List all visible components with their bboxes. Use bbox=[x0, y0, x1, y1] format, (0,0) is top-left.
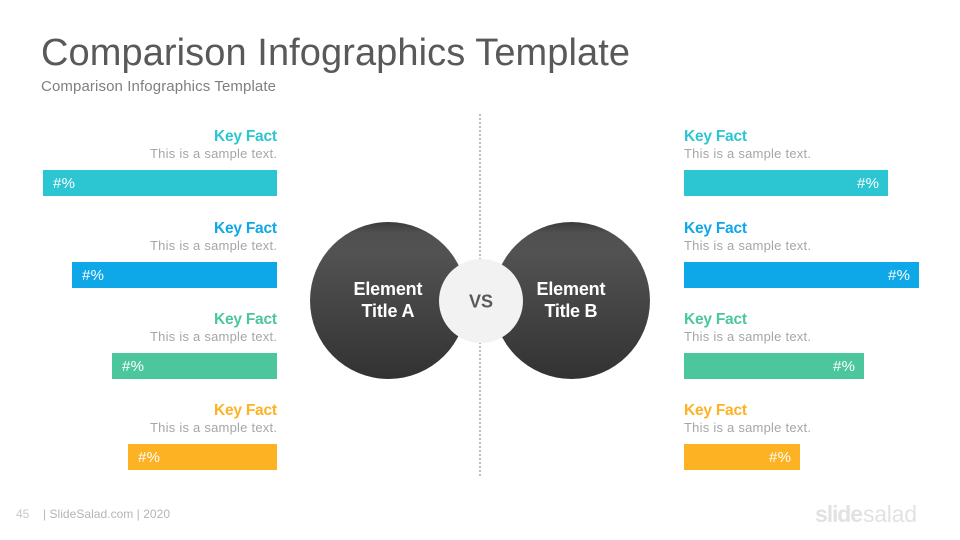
left fact 1: Key Fact bbox=[214, 128, 277, 145]
right fact 3: #% bbox=[833, 358, 855, 375]
right fact 4: #% bbox=[769, 449, 791, 466]
logo wordmark: salad bbox=[863, 501, 917, 527]
VS badge: VS bbox=[469, 292, 493, 312]
right fact 3: Key Fact bbox=[684, 311, 747, 328]
circle: element A bbox=[310, 222, 467, 379]
left fact 3: This is a sample text. bbox=[150, 329, 277, 344]
left fact 4: Key Fact bbox=[214, 402, 277, 419]
right fact 2: This is a sample text. bbox=[684, 238, 811, 253]
subtitle: Comparison Infographics Template bbox=[41, 78, 276, 95]
left fact 2 bbox=[72, 220, 277, 288]
left fact 1: #% bbox=[53, 175, 75, 192]
panel: right facts bbox=[684, 128, 919, 470]
left fact 4: This is a sample text. bbox=[150, 420, 277, 435]
left fact 2: This is a sample text. bbox=[150, 238, 277, 253]
circle: element A: Element bbox=[354, 279, 422, 299]
right fact 1 bbox=[684, 128, 888, 196]
right fact 2: Key Fact bbox=[684, 220, 747, 237]
right fact 4: This is a sample text. bbox=[684, 420, 811, 435]
VS badge bbox=[439, 259, 523, 343]
logo wordmark bbox=[815, 501, 917, 527]
right fact 2: #% bbox=[888, 267, 910, 284]
left fact 1 bbox=[43, 128, 277, 196]
left fact 3: Key Fact bbox=[214, 311, 277, 328]
title: Comparison Infographics Template bbox=[41, 32, 630, 74]
circle: element A: Title A bbox=[362, 301, 414, 321]
right fact 4 bbox=[684, 402, 811, 470]
right fact 1: Key Fact bbox=[684, 128, 747, 145]
right fact 3: This is a sample text. bbox=[684, 329, 811, 344]
right fact 1: #% bbox=[857, 175, 879, 192]
left fact 4 bbox=[128, 402, 277, 470]
left fact 2: #% bbox=[82, 267, 104, 284]
right fact 4: Key Fact bbox=[684, 402, 747, 419]
center dotted divider bbox=[479, 114, 481, 476]
footer: page number and source: | SlideSalad.com | 2020 bbox=[43, 507, 170, 521]
right fact 2 bbox=[684, 220, 919, 288]
circle: element B: Element bbox=[536, 279, 606, 299]
panel: left facts bbox=[43, 128, 277, 470]
left fact 1: This is a sample text. bbox=[150, 146, 277, 161]
circle: element B: Title B bbox=[544, 301, 598, 321]
right fact 1: This is a sample text. bbox=[684, 146, 811, 161]
circle: element B bbox=[493, 222, 650, 379]
footer: page number and source: 45 bbox=[16, 507, 30, 521]
right fact 3 bbox=[684, 311, 864, 379]
left fact 2: Key Fact bbox=[214, 220, 277, 237]
logo wordmark: slide bbox=[815, 501, 863, 527]
left fact 3: #% bbox=[122, 358, 144, 375]
left fact 3 bbox=[112, 311, 277, 379]
left fact 4: #% bbox=[138, 449, 160, 466]
